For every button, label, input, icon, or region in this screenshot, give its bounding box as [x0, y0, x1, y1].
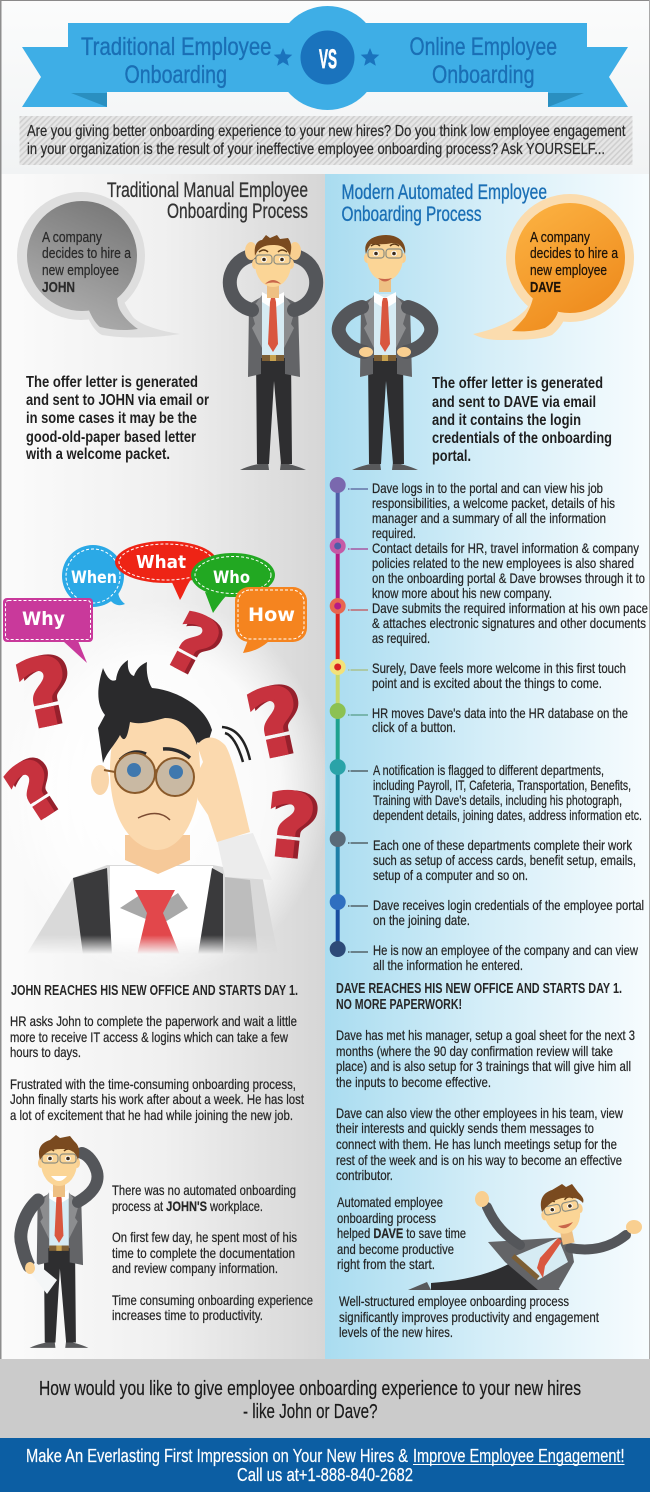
speech bubble: Dave: decides to hire a [530, 246, 619, 262]
text: offer letter Dave [432, 375, 612, 465]
speech bubble: John: A company [42, 230, 103, 246]
timeline [330, 477, 648, 973]
text: offer letter Dave: credentials of the onboarding [432, 430, 612, 447]
figure: Dave leaping [408, 1184, 642, 1290]
heading: online onboarding: Onboarding [432, 61, 534, 89]
confused man glow [0, 600, 330, 980]
text: offer letter John: The offer letter is generated [26, 374, 198, 391]
text: conclusion Dave: levels of the new hires. [339, 1324, 453, 1340]
text: Dave summary: helped DAVE to save time [337, 1225, 466, 1241]
text: conclusion Dave: significantly improves productivity and engagement [339, 1309, 599, 1325]
text: Dave day 1: their interests and quickly sends them messages to [336, 1120, 594, 1136]
step 2: know more about his new company. [372, 585, 552, 601]
heading: modern automated process [342, 181, 547, 226]
timeline connectors [348, 489, 368, 952]
speech bubble: Dave [473, 194, 634, 340]
step 4: point and is excited about the things to come. [372, 675, 602, 691]
figure: John scratching head [21, 1135, 98, 1348]
text: offer letter Dave: and it contains the login [432, 412, 581, 429]
step 1: required. [372, 525, 416, 541]
text: offer letter John: in some cases it may be the [26, 410, 197, 427]
ribbon tails [22, 47, 628, 107]
heading: online onboarding [410, 33, 557, 89]
ribbon folds [71, 93, 584, 107]
question band: - like John or Dave? [243, 1401, 378, 1423]
text: Dave day 1: contributor. [336, 1167, 393, 1183]
text: John summary: There was no automated onboarding [112, 1182, 296, 1198]
question marks: ? [238, 666, 313, 781]
intro strip [20, 116, 632, 165]
step 1: Dave logs in to the portal and can view his job [372, 480, 603, 496]
speech bubble: John [17, 192, 180, 338]
step 9 [373, 942, 639, 973]
text: conclusion Dave [339, 1293, 599, 1340]
text: offer letter John [25, 374, 209, 463]
heading: online onboarding: Online Employee [410, 33, 557, 61]
text: conclusion Dave: Well-structured employee onboarding process [339, 1293, 569, 1309]
question marks [0, 595, 325, 880]
speech bubble: Why: Why [22, 608, 66, 630]
step 7 [373, 837, 636, 883]
text: offer letter John: good-old-paper based letter [26, 429, 196, 446]
heading: traditional manual process [107, 179, 308, 223]
top background [0, 0, 650, 174]
text: Dave summary: right from the start. [337, 1256, 435, 1272]
step 5: click of a button. [372, 719, 456, 735]
speech bubble: Who: Who [213, 568, 250, 588]
heading: traditional manual process: Traditional Manual Employee [107, 179, 308, 202]
heading: traditional manual process: Onboarding Process [167, 200, 308, 223]
text: John summary: Time consuming onboarding experience [112, 1292, 313, 1308]
text: John day 1: Frustrated with the time-consuming onboarding process, [10, 1076, 296, 1092]
speech bubble: Who [191, 553, 275, 613]
question band [0, 1359, 650, 1438]
speech bubble: How: How [248, 604, 295, 626]
question marks: ? [259, 773, 320, 880]
question marks: ? [155, 597, 237, 698]
text: Dave day 1: the inputs to become effective. [336, 1074, 491, 1090]
step 4 [372, 660, 626, 691]
text: John summary: increases time to productivity. [112, 1307, 263, 1323]
illustration: confused man [26, 660, 278, 955]
step 5 [372, 705, 628, 735]
step 2 [372, 540, 645, 601]
text: Dave summary: Automated employee [337, 1194, 443, 1210]
text: Dave summary: onboarding process [337, 1210, 436, 1226]
text: John day 1: HR asks John to complete the paperwork and wait a little [10, 1013, 297, 1029]
title banner: VS [319, 44, 337, 74]
panel: traditional process background [0, 174, 325, 1359]
call to action band: Call us at+1-888-840-2682 [237, 1465, 413, 1485]
text: Dave summary [337, 1194, 466, 1272]
question marks: ? [264, 773, 325, 880]
panel: online process background [325, 174, 650, 1359]
step 6 [373, 762, 642, 823]
speech bubble: How [235, 587, 307, 653]
question marks: ? [151, 595, 234, 696]
text: offer letter Dave: The offer letter is generated [432, 375, 603, 392]
step 3 [372, 600, 648, 646]
call to action band [0, 1438, 650, 1492]
text: John day 1: hours to days. [10, 1044, 81, 1060]
text: Dave day 1 [336, 981, 635, 1183]
speech bubble: When [62, 545, 125, 607]
text: John summary [112, 1182, 313, 1323]
step 3: as required. [372, 630, 430, 646]
heading: modern automated process: Onboarding Process [342, 203, 482, 226]
step 8: on the joining date. [373, 912, 470, 928]
speech bubble: John: new employee [42, 263, 119, 279]
text: John day 1: JOHN REACHES HIS NEW OFFICE AND STARTS DAY 1. [11, 983, 298, 999]
speech bubble: John: JOHN [42, 280, 75, 296]
title banner [22, 6, 628, 110]
stars [274, 48, 379, 66]
figure: John stressed [230, 235, 316, 470]
step 9: all the information he entered. [373, 957, 523, 973]
speech bubble: What [115, 541, 217, 600]
text: John day 1: a lot of excitement that he had while joining the new job. [10, 1107, 293, 1123]
question marks: ? [243, 665, 317, 780]
speech bubble: Why [3, 598, 93, 663]
text: John summary: and review company information. [112, 1260, 278, 1276]
text: John summary: On first few day, he spent most of his [112, 1229, 297, 1245]
call to action band: Make An Everlasting First Impression on Your New Hires & [26, 1446, 408, 1466]
text: John day 1: John finally starts his work after about a week. He has lost [10, 1091, 304, 1107]
timeline line segments [336, 485, 340, 949]
text: John summary: time to complete the documentation [112, 1245, 295, 1261]
text: John day 1 [10, 983, 304, 1123]
timeline dots [330, 477, 346, 957]
text: Dave summary: and become productive [337, 1241, 454, 1257]
text: offer letter Dave: and sent to DAVE via email [432, 394, 596, 411]
text: offer letter John: and sent to JOHN via email or [26, 392, 209, 409]
text: Dave day 1: NO MORE PAPERWORK! [336, 997, 462, 1013]
step 7: setup of a computer and so on. [373, 867, 528, 883]
speech bubble: Dave: A company [530, 230, 591, 246]
heading: traditional onboarding [81, 33, 272, 89]
text: John summary: process at JOHN'S workplace. [112, 1198, 263, 1214]
speech bubble: Dave: new employee [530, 263, 607, 279]
text: John day 1: more to receive IT access & logins which can take a few [10, 1029, 289, 1045]
speech bubble: John: decides to hire a [42, 246, 132, 262]
speech bubble: Dave: DAVE [530, 280, 561, 296]
VS circle [300, 30, 354, 84]
ribbon body [68, 23, 587, 92]
step 8 [373, 897, 644, 928]
figure: Dave confident [339, 235, 431, 470]
text: offer letter Dave: portal. [432, 448, 471, 465]
question marks: ? [12, 635, 86, 750]
step 1 [372, 480, 615, 541]
heading: traditional onboarding: Onboarding [124, 61, 227, 89]
speech bubble: What: What [136, 552, 186, 573]
step 1: manager and a summary of all the information [372, 510, 606, 526]
centre badge [276, 6, 380, 110]
question marks: ? [7, 636, 82, 751]
text: offer letter John: with a welcome packet. [25, 446, 170, 463]
heading: modern automated process: Modern Automated Employee [342, 181, 547, 204]
heading: traditional onboarding: Traditional Employee [81, 33, 272, 61]
speech bubble: When: When [71, 568, 117, 588]
